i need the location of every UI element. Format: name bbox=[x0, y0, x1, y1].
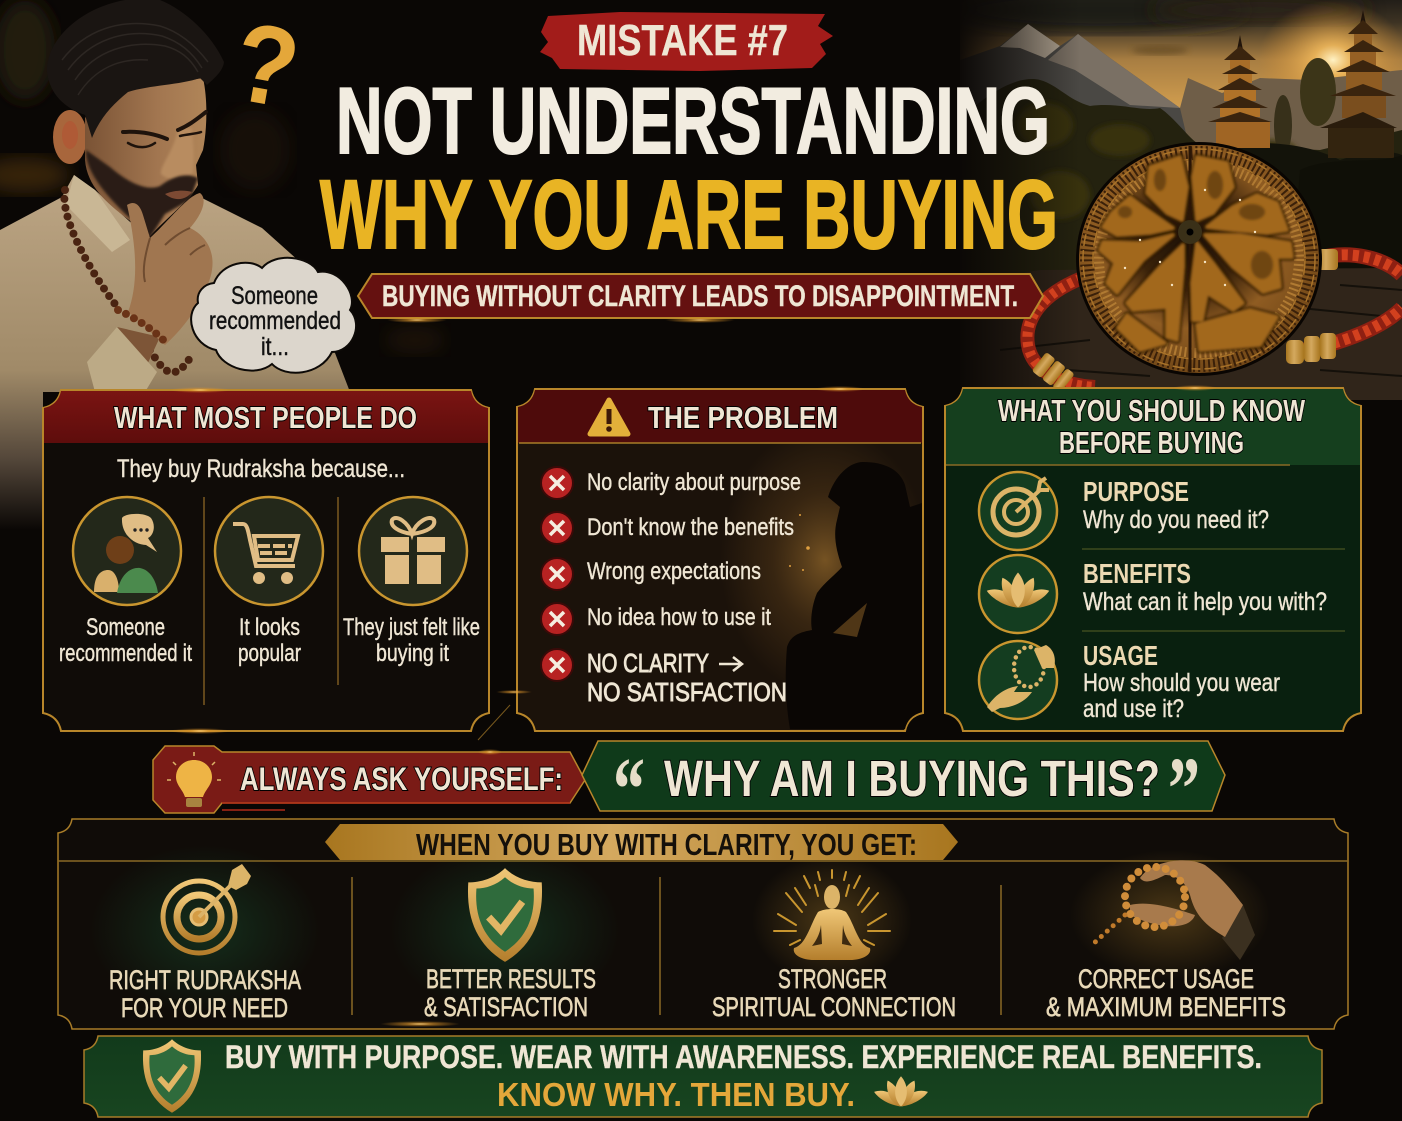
problem list: No clarity about purpose bbox=[587, 469, 801, 496]
nose bbox=[161, 128, 194, 179]
mountains bbox=[960, 24, 1190, 150]
subtitle banner bbox=[358, 274, 1043, 323]
icon: hand with prayer beads bbox=[1092, 860, 1255, 960]
label: correct usage: & MAXIMUM BENEFITS bbox=[1046, 992, 1286, 1022]
title bbox=[320, 68, 1058, 269]
item: benefits: What can it help you with? bbox=[1083, 588, 1327, 616]
icon: usage hand and beads bbox=[979, 641, 1057, 719]
speech bubble: recommended bbox=[209, 307, 341, 335]
mouth bbox=[165, 191, 192, 199]
silhouette of a distressed person bbox=[786, 462, 922, 729]
gold ribbon heading: WHEN YOU BUY WITH CLARITY, YOU GET: bbox=[416, 827, 917, 862]
arrow bbox=[719, 657, 742, 671]
distant hills bbox=[1180, 70, 1402, 160]
forest hills bbox=[960, 79, 1402, 295]
label: spiritual connection: SPIRITUAL CONNECTION bbox=[712, 992, 956, 1022]
heading: WHAT MOST PEOPLE DO bbox=[114, 400, 417, 435]
gold ribbon heading bbox=[325, 824, 958, 862]
bracelet bbox=[1027, 255, 1402, 387]
background scene: mountains and temples bbox=[880, 0, 1402, 400]
label: felt like buying bbox=[343, 614, 480, 667]
problem list: No idea how to use it bbox=[587, 604, 771, 631]
label: better results bbox=[424, 964, 596, 1022]
banner: why am I buying this: “ bbox=[613, 740, 645, 839]
label: it looks popular bbox=[238, 614, 301, 667]
speech bubble: Someone bbox=[231, 282, 318, 310]
label: someone recommended: Someone bbox=[86, 614, 165, 641]
item: purpose bbox=[1083, 476, 1269, 534]
call to action: KNOW WHY. THEN BUY. bbox=[497, 1076, 855, 1113]
icon: check shield bbox=[143, 1039, 201, 1113]
hand bbox=[127, 193, 213, 345]
beard bbox=[86, 150, 198, 238]
icon: gift box bbox=[359, 497, 467, 605]
label: spiritual connection: STRONGER bbox=[778, 964, 887, 994]
problem list bbox=[541, 467, 801, 707]
item: usage: USAGE bbox=[1083, 640, 1158, 671]
problem list: Don't know the benefits bbox=[587, 514, 794, 541]
banner: why am I buying this bbox=[582, 740, 1225, 839]
heading: WHAT YOU SHOULD KNOW bbox=[998, 393, 1306, 428]
icon: purpose target bbox=[979, 472, 1057, 550]
item: purpose: PURPOSE bbox=[1083, 476, 1189, 507]
label: someone recommended bbox=[59, 614, 192, 667]
label: right rudraksha: RIGHT RUDRAKSHA bbox=[109, 965, 301, 995]
panel: benefits of clarity bbox=[58, 819, 1348, 1029]
label: it looks popular: popular bbox=[238, 640, 301, 667]
item: purpose: Why do you need it? bbox=[1083, 506, 1269, 534]
label: correct usage: CORRECT USAGE bbox=[1078, 964, 1254, 994]
label: correct usage bbox=[1046, 964, 1286, 1022]
icon: green shield bbox=[468, 868, 542, 962]
banner: why am I buying this: WHY AM I BUYING THIS? bbox=[664, 750, 1160, 807]
label: spiritual connection bbox=[712, 964, 956, 1022]
sparkle between panels bbox=[478, 690, 532, 740]
heading: BEFORE BUYING bbox=[1059, 425, 1244, 460]
label: better results: & SATISFACTION bbox=[424, 992, 588, 1022]
banner: always ask yourself bbox=[153, 746, 585, 813]
heading bbox=[998, 393, 1306, 460]
icon: warning triangle bbox=[590, 400, 628, 434]
badge: mistake number: MISTAKE #7 bbox=[577, 16, 788, 65]
problem list: NO CLARITY bbox=[587, 648, 709, 678]
temple: right pagoda bbox=[1320, 10, 1397, 158]
hair bbox=[47, 0, 224, 138]
temple: left pagoda bbox=[1208, 35, 1272, 148]
item: usage bbox=[1083, 640, 1280, 723]
bead lobes bbox=[1100, 157, 1292, 350]
banner: always ask yourself: ALWAYS ASK YOURSELF: bbox=[240, 761, 563, 797]
panel: the problem bbox=[517, 386, 930, 731]
speech bubble bbox=[191, 258, 356, 373]
background scene: dark forest on the left bbox=[0, 0, 445, 354]
problem list: NO SATISFACTION bbox=[587, 677, 787, 707]
panel: what most people do bbox=[43, 387, 489, 734]
icon: rudraksha bead with red bracelet bbox=[1027, 142, 1402, 393]
panel: what you should know bbox=[945, 385, 1361, 731]
label: better results: BETTER RESULTS bbox=[426, 964, 596, 994]
label: felt like buying: They just felt like bbox=[343, 614, 480, 641]
label: felt like buying: buying it bbox=[376, 640, 449, 667]
icon: meditating figure bbox=[774, 870, 890, 960]
icon: light bulb bbox=[167, 752, 221, 807]
title: NOT UNDERSTANDING bbox=[336, 68, 1050, 173]
label: right rudraksha bbox=[109, 965, 301, 1023]
subtitle banner: BUYING WITHOUT CLARITY LEADS TO DISAPPOINTMENT. bbox=[382, 280, 1018, 313]
bead body bbox=[1076, 142, 1322, 376]
eyes and brows bbox=[123, 112, 206, 147]
intro text: They buy Rudraksha because... bbox=[117, 455, 405, 483]
icon: shopping cart bbox=[215, 497, 323, 605]
face bbox=[85, 78, 206, 236]
label: it looks popular: It looks bbox=[239, 614, 300, 641]
icon: benefits lotus bbox=[979, 555, 1057, 633]
banner: why am I buying this: ” bbox=[1168, 740, 1200, 839]
speech bubble: it... bbox=[261, 333, 289, 361]
item: usage: How should you wear bbox=[1083, 669, 1280, 697]
illustration: thoughtful man bbox=[0, 0, 350, 530]
heading: THE PROBLEM bbox=[648, 400, 838, 435]
label: right rudraksha: FOR YOUR NEED bbox=[121, 993, 288, 1023]
sleeve cuff and wrist bbox=[117, 327, 160, 365]
title: WHY YOU ARE BUYING bbox=[320, 160, 1058, 269]
problem list: Wrong expectations bbox=[587, 558, 761, 585]
icon: question mark: ? bbox=[225, 0, 308, 132]
bead ridges bbox=[1083, 149, 1315, 369]
icon: people talking bbox=[73, 497, 181, 605]
stone ground bbox=[880, 268, 1402, 400]
necklace bbox=[64, 190, 193, 372]
ear bbox=[53, 110, 87, 164]
icon: small lotus bbox=[874, 1076, 928, 1106]
closing banner bbox=[84, 1036, 1322, 1117]
label: someone recommended: recommended it bbox=[59, 640, 192, 667]
item: usage: and use it? bbox=[1083, 695, 1184, 723]
item: benefits: BENEFITS bbox=[1083, 558, 1191, 589]
item: benefits bbox=[1083, 558, 1327, 616]
icon: target with arrow bbox=[163, 864, 251, 953]
kurta bbox=[0, 175, 350, 530]
